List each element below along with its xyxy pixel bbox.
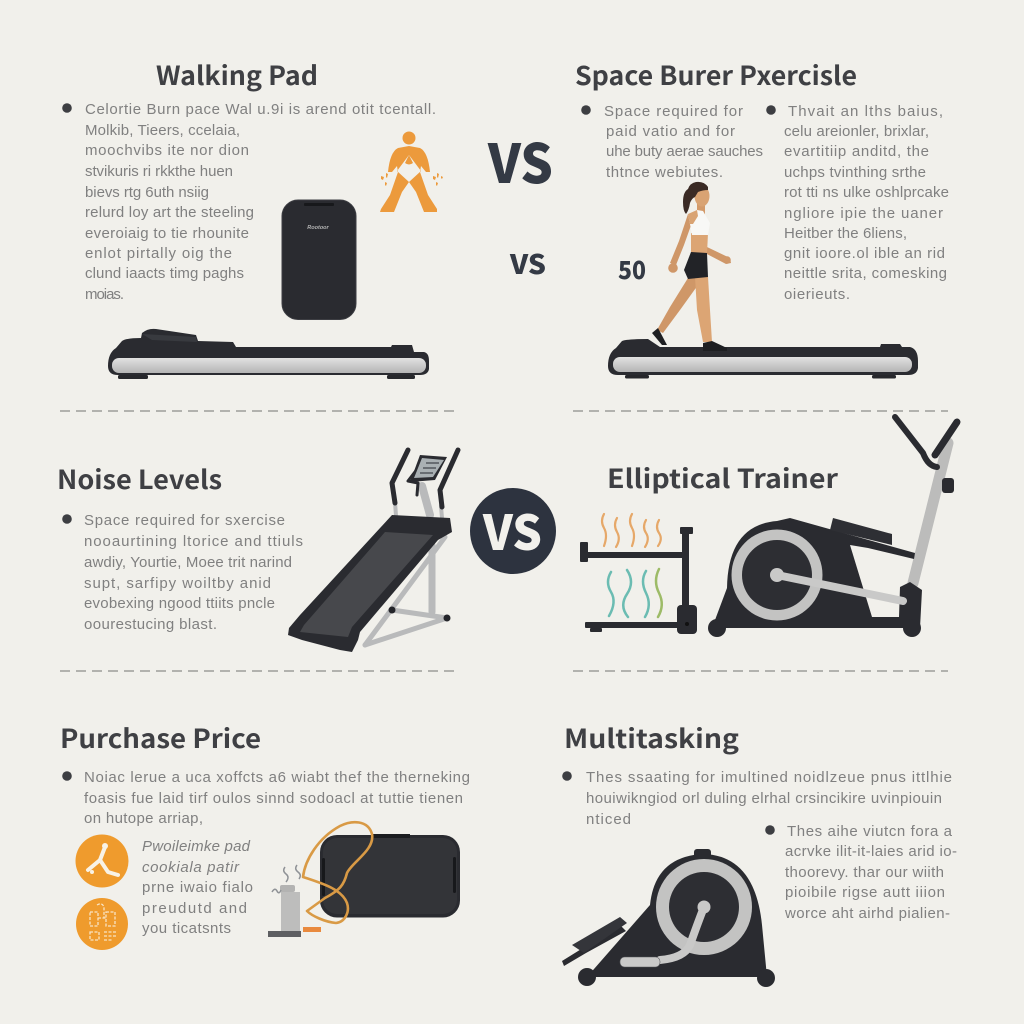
icon: heat rack with waves <box>580 514 697 634</box>
text block: space required <box>581 103 763 181</box>
text block: multitasking <box>562 769 952 828</box>
icon: folded pad with cable <box>303 822 460 923</box>
text block: noise levels: awdiy, Yourtie, Moee trit narind <box>84 554 292 571</box>
text block: second bullet: acrvke ilit-it-laies arid io- <box>785 843 957 860</box>
large VS label: VS <box>487 120 553 199</box>
text block: purchase price: on hutope arriap, <box>84 810 203 827</box>
text block: right column: gnit ioore.ol ible an rid <box>784 245 945 262</box>
text block: right column: evartitiip anditd, the <box>784 143 929 160</box>
text block: calorie burn: stvikuris ri rkkthe huen <box>85 163 233 180</box>
text block: italic notes: cookiala patir <box>142 859 240 876</box>
text block: space required: Space required for <box>604 103 743 120</box>
text block: italic notes: Pwoileimke pad <box>142 838 251 855</box>
text block: right column <box>766 103 949 303</box>
text block: purchase price: foasis fue laid tirf oulos sinnd sodoacl at tuttie tienen <box>84 790 463 807</box>
text block: right column: Heitber the 6liens, <box>784 225 907 242</box>
text block: calorie burn: Molkib, Tieers, ccelaia, <box>85 122 240 139</box>
text block: noise levels: supt, sarfipy woiltby anid <box>84 575 271 592</box>
text block: right column: oierieuts. <box>784 286 850 303</box>
text block: calorie burn: clund iaacts timg paghs <box>85 265 244 282</box>
treadmill: walking pad side view <box>108 329 429 379</box>
panel: multitasking <box>562 719 957 987</box>
VS circle badge <box>470 488 556 574</box>
icon: folded phone-like pad <box>282 200 356 320</box>
text block: calorie burn: moochvibs ite nor dion <box>85 142 249 159</box>
text block: noise levels: oourestucing blast. <box>84 616 217 633</box>
panel: elliptical trainer <box>580 417 957 637</box>
text block: right column: Thvait an lths baius, <box>788 103 943 120</box>
treadmill: incline <box>288 450 458 652</box>
text block: calorie burn: enlot pirtally oig the <box>85 245 232 262</box>
elliptical trainer: compact <box>562 849 775 987</box>
heading: walking pad: Walking Pad <box>156 56 318 93</box>
text block: multitasking: Thes ssaating for imultined noidlzeue pnus ittlhie <box>586 769 952 786</box>
text block: second bullet: worce aht airhd pialien- <box>784 905 950 922</box>
figure: walking woman <box>652 182 731 351</box>
icon: orange exercise circle <box>76 834 128 888</box>
text block: second bullet: thoorevy. thar our wiith <box>785 864 944 881</box>
panel: walking pad <box>62 56 443 379</box>
VS circle badge: VS <box>482 494 542 564</box>
heading: noise levels: Noise Levels <box>57 460 222 497</box>
text block: space required: uhe buty aerae sauches <box>606 143 763 160</box>
text block: space required: thtnce webiutes. <box>606 164 723 181</box>
panel: purchase price <box>60 719 470 950</box>
text block: calorie burn: bievs rtg 6uth nsiig <box>85 184 209 201</box>
text block: noise levels: nooaurtining ltorice and ttiuls <box>84 533 303 550</box>
text block: italic notes <box>142 838 253 937</box>
text block: calorie burn <box>62 101 436 303</box>
text block: second bullet <box>765 823 957 922</box>
text block: purchase price: Noiac lerue a uca xoffcts a6 wiabt thef the therneking <box>84 769 470 786</box>
elliptical trainer machine <box>708 417 957 637</box>
text block: second bullet: pioibile rigse autt iiion <box>785 884 945 901</box>
text block: noise levels: evobexing ngood ttiits pncle <box>84 595 275 612</box>
text block: multitasking: houiwikngiod orl duling elrhal crsincikire uvinpiouin <box>586 790 942 807</box>
text block: right column: neittle srita, comesking <box>784 265 947 282</box>
small VS label: VS <box>509 243 546 282</box>
text block: calorie burn: Celortie Burn pace Wal u.9i is arend otit tcentall. <box>85 101 436 118</box>
text block: multitasking: nticed <box>586 811 631 828</box>
icon: folded phone-like pad: Rootoor <box>307 225 330 231</box>
text block: calorie burn: everoiaig to tie rhounite <box>85 225 249 242</box>
text block: right column: rot tti ns ulke oshlprcake <box>784 184 949 201</box>
heading: purchase price: Purchase Price <box>60 719 261 756</box>
heading: space exercise: Space Burer Pxercisle <box>575 56 857 93</box>
text block: italic notes: preudutd and <box>142 900 247 917</box>
treadmill: flat with runner deck <box>608 339 918 378</box>
text block: calorie burn: relurd loy art the steeling <box>85 204 254 221</box>
text block: calorie burn: moias. <box>85 286 124 303</box>
panel: noise levels <box>57 450 458 652</box>
text block: space required: paid vatio and for <box>606 123 735 140</box>
text block: noise levels <box>62 512 303 633</box>
icon: orange body figure <box>380 132 443 212</box>
heading: multitasking: Multitasking <box>564 719 740 756</box>
number 50: 50 <box>618 251 646 287</box>
text block: italic notes: you ticatsnts <box>142 920 231 937</box>
text block: right column: celu areionler, brixlar, <box>784 123 929 140</box>
icon: smoking device <box>268 865 321 937</box>
text block: italic notes: prne iwaio fialo <box>142 879 253 896</box>
text block: right column: uchps tvinthing srthe <box>784 164 926 181</box>
panel: space exercise <box>575 56 949 378</box>
text block: purchase price <box>62 769 470 827</box>
icon: orange components circle <box>76 898 128 950</box>
heading: elliptical trainer: Elliptical Trainer <box>607 459 839 496</box>
text block: noise levels: Space required for sxercise <box>84 512 285 529</box>
text block: second bullet: Thes aihe viutcn fora a <box>787 823 953 840</box>
text block: right column: ngliore ipie the uaner <box>784 205 943 222</box>
